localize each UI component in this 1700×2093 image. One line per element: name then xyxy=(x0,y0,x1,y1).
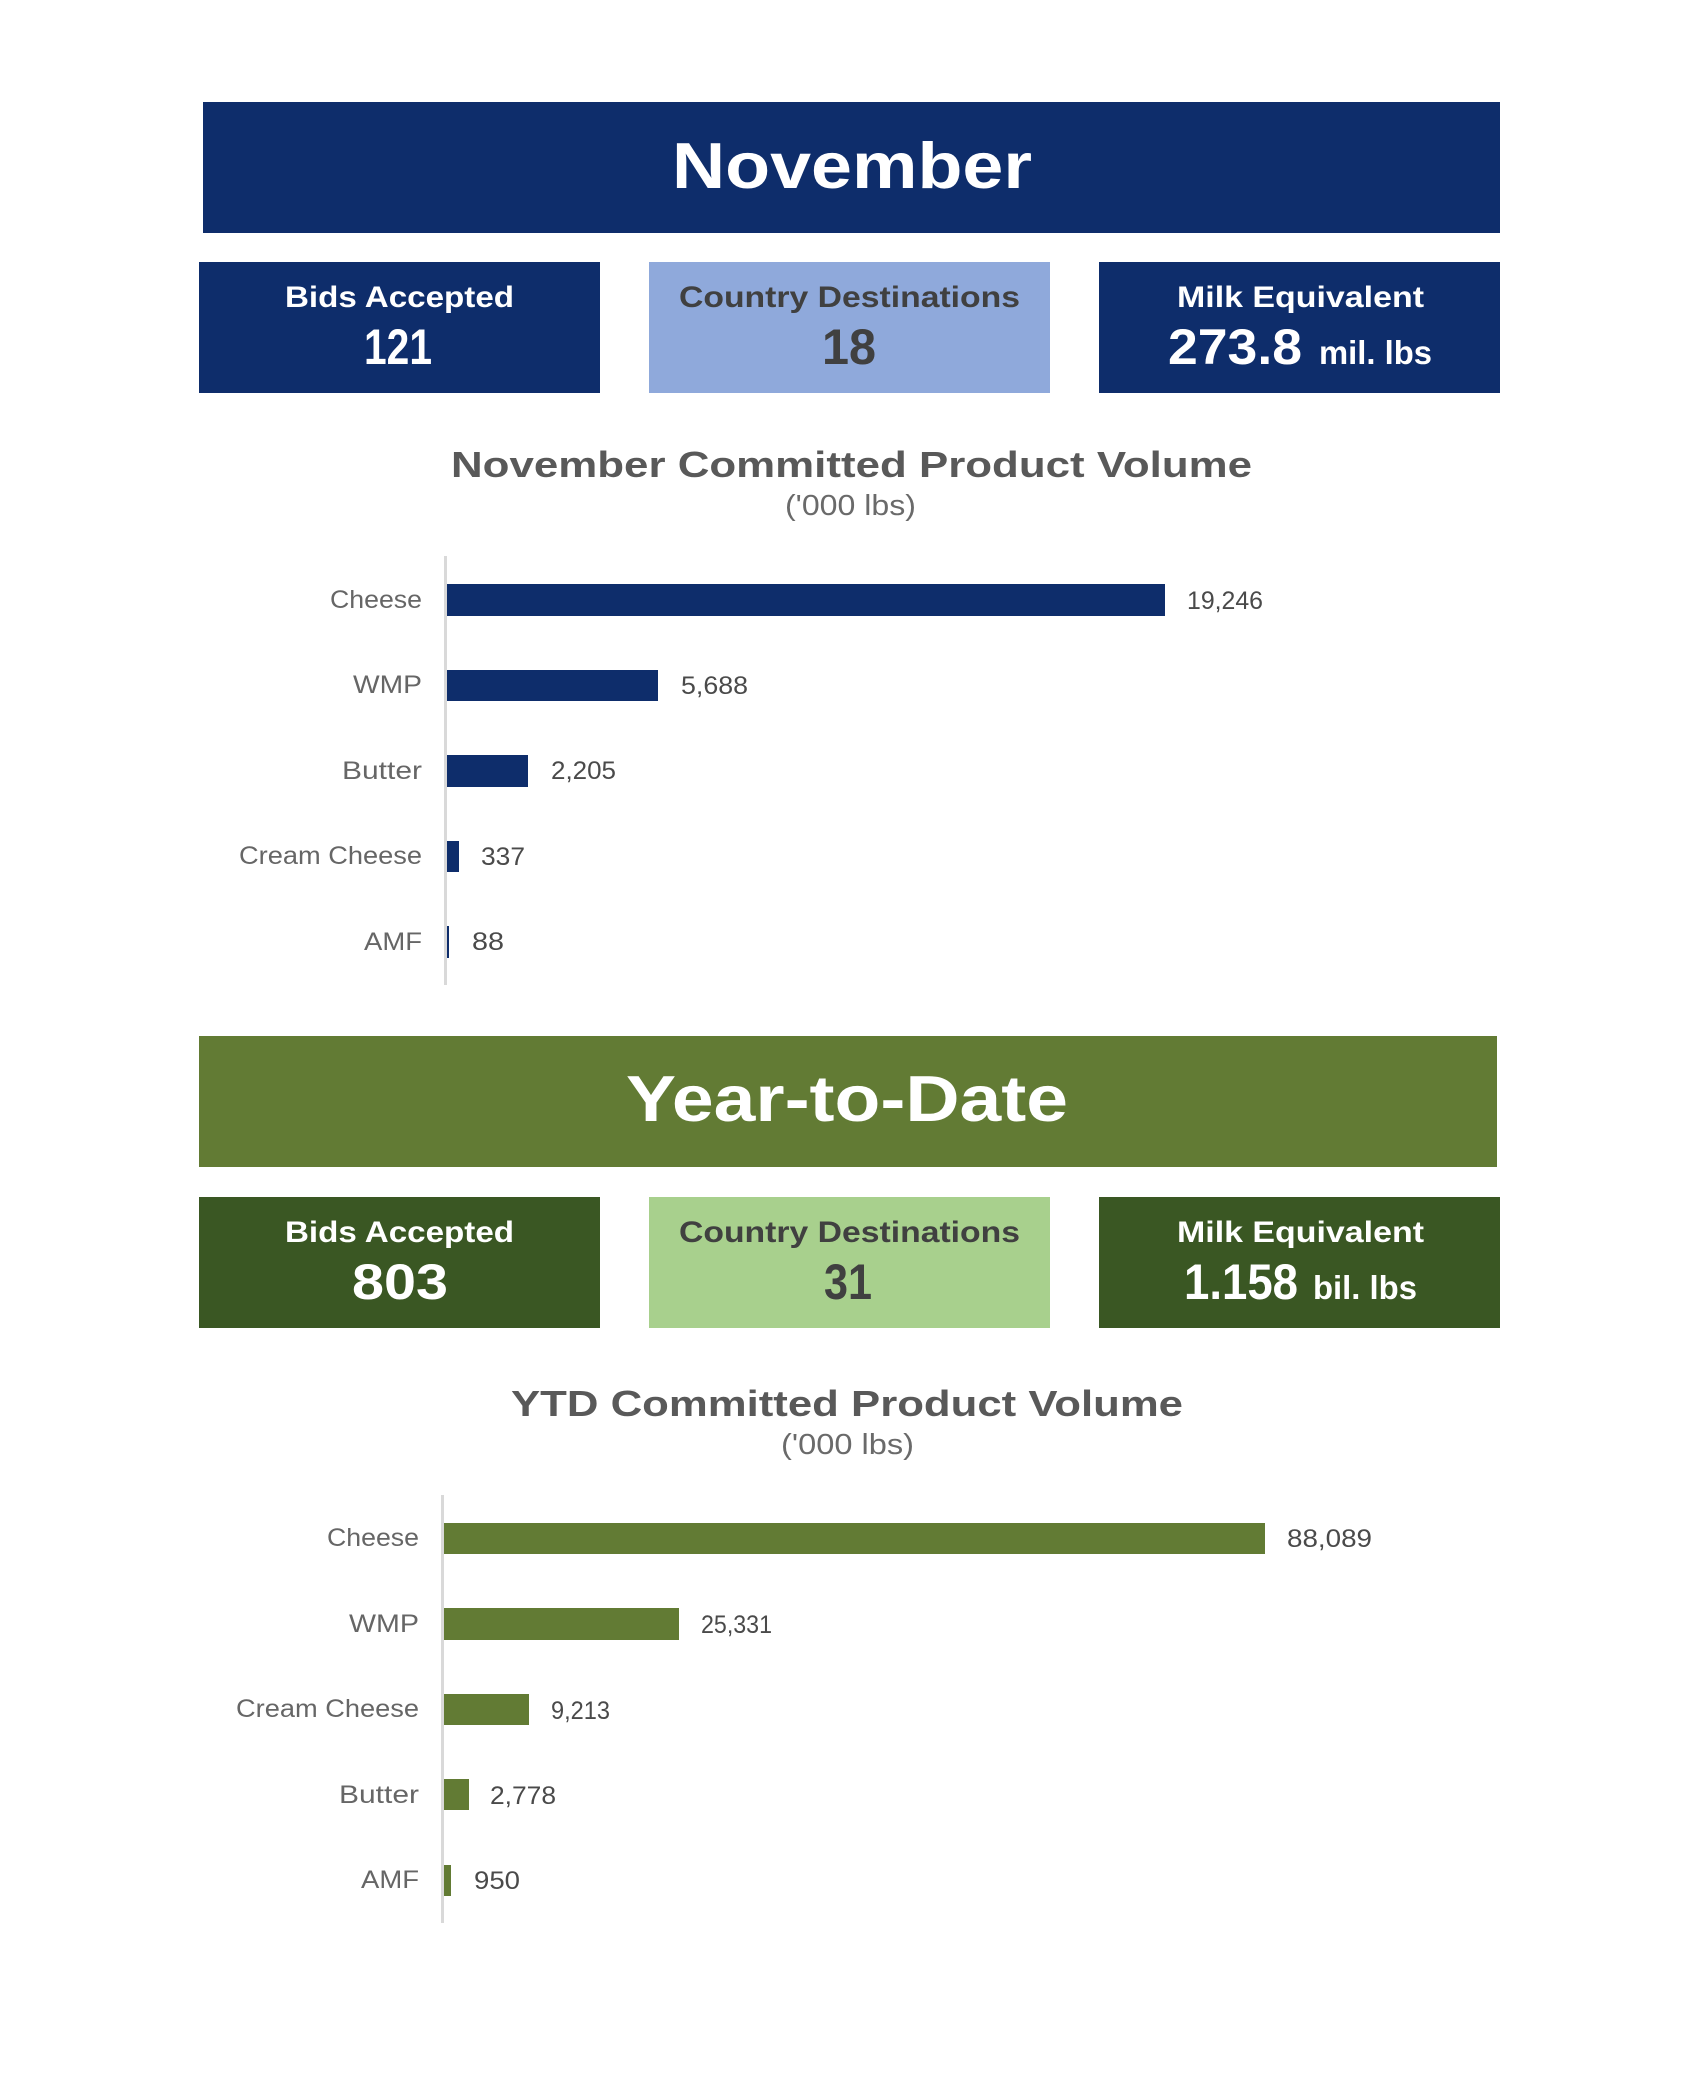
stat card: Country Destinations: 18 xyxy=(822,319,876,375)
stat card: Country Destinations: Country Destinations xyxy=(679,281,1020,314)
bar: Butter 2,205: 2,205 xyxy=(551,757,616,785)
bar: Cream Cheese 9,213: Cream Cheese xyxy=(236,1695,419,1723)
stat card: Bids Accepted: 803 xyxy=(352,1254,448,1310)
stat card: Milk Equivalent: Milk Equivalent xyxy=(1177,1216,1424,1249)
stat card: Country Destinations xyxy=(649,1197,1050,1328)
bar: WMP 25,331: 25,331 xyxy=(701,1611,772,1639)
bar: AMF 88: AMF xyxy=(364,928,422,956)
bar: AMF 950: AMF xyxy=(361,1866,419,1894)
bar: Cream Cheese 337: Cream Cheese xyxy=(239,842,422,870)
stat card: Bids Accepted: 121 xyxy=(364,319,432,375)
bar: WMP 5,688: 5,688 xyxy=(681,672,748,700)
bar: Cheese 88,089 xyxy=(327,1523,1372,1554)
bar: Butter 2,778 xyxy=(339,1779,556,1810)
title banner: November: November xyxy=(672,129,1032,202)
chart heading: November Committed Product Volume: ('000 lbs) xyxy=(785,490,916,522)
chart heading: YTD Committed Product Volume: YTD Committed Product Volume xyxy=(511,1383,1183,1424)
stat card: Milk Equivalent xyxy=(1099,1197,1500,1328)
chart heading: November Committed Product Volume: November Committed Product Volume xyxy=(451,444,1252,485)
bar: WMP 25,331 xyxy=(349,1608,772,1640)
bar: Cream Cheese 9,213: 9,213 xyxy=(551,1697,610,1725)
bar: AMF 950: 950 xyxy=(474,1867,520,1895)
bar: Cheese 19,246: 19,246 xyxy=(1187,587,1263,615)
bar: WMP 5,688: WMP xyxy=(353,671,422,699)
bar: Cream Cheese 337: 337 xyxy=(481,843,525,871)
title banner: Year-to-Date: Year-to-Date xyxy=(626,1062,1068,1135)
stat card: Country Destinations: 31 xyxy=(824,1254,872,1310)
bar: Butter 2,778: Butter xyxy=(339,1781,419,1809)
stat card: Milk Equivalent: bil. lbs xyxy=(1313,1269,1417,1306)
stat card: Milk Equivalent: Milk Equivalent xyxy=(1177,281,1424,314)
section: Year-to-Date xyxy=(199,1036,1500,1923)
stat card: Milk Equivalent: mil. lbs xyxy=(1319,334,1432,371)
chart heading: YTD Committed Product Volume xyxy=(511,1383,1183,1461)
bar: Cream Cheese 337 xyxy=(239,841,525,872)
bar: Cheese 88,089: Cheese xyxy=(327,1524,419,1552)
chart heading: YTD Committed Product Volume: ('000 lbs) xyxy=(781,1429,914,1461)
title banner: Year-to-Date xyxy=(199,1036,1497,1167)
stat card: Bids Accepted xyxy=(199,1197,600,1328)
bar: Cheese 88,089: 88,089 xyxy=(1287,1525,1372,1553)
section: November xyxy=(199,102,1500,985)
bar chart: YTD volume xyxy=(236,1495,1372,1923)
bar: Cheese 19,246: Cheese xyxy=(330,586,422,614)
chart heading: November Committed Product Volume xyxy=(451,444,1252,522)
bar: Butter 2,205 xyxy=(342,755,616,787)
bar: AMF 88: 88 xyxy=(472,928,504,956)
stat card: Bids Accepted: Bids Accepted xyxy=(285,281,514,314)
stat card: Milk Equivalent: 1.158 xyxy=(1184,1254,1298,1310)
bar: WMP 25,331: WMP xyxy=(349,1610,419,1638)
stat card: Milk Equivalent xyxy=(1099,262,1500,393)
bar: WMP 5,688 xyxy=(353,670,748,701)
bar: AMF 88 xyxy=(364,926,504,958)
bar: Cheese 19,246 xyxy=(330,584,1263,616)
bar: AMF 950 xyxy=(361,1865,520,1896)
bar: Cream Cheese 9,213 xyxy=(236,1694,610,1725)
bar chart: November volume xyxy=(239,556,1263,985)
title banner: November xyxy=(203,102,1500,233)
stat card: Bids Accepted xyxy=(199,262,600,393)
stat card: Bids Accepted: Bids Accepted xyxy=(285,1216,514,1249)
stat card: Country Destinations: Country Destinations xyxy=(679,1216,1020,1249)
stat card: Country Destinations xyxy=(649,262,1050,393)
stat card: Milk Equivalent: 273.8 xyxy=(1168,319,1302,375)
bar: Butter 2,778: 2,778 xyxy=(490,1782,556,1810)
bar: Butter 2,205: Butter xyxy=(342,757,422,785)
